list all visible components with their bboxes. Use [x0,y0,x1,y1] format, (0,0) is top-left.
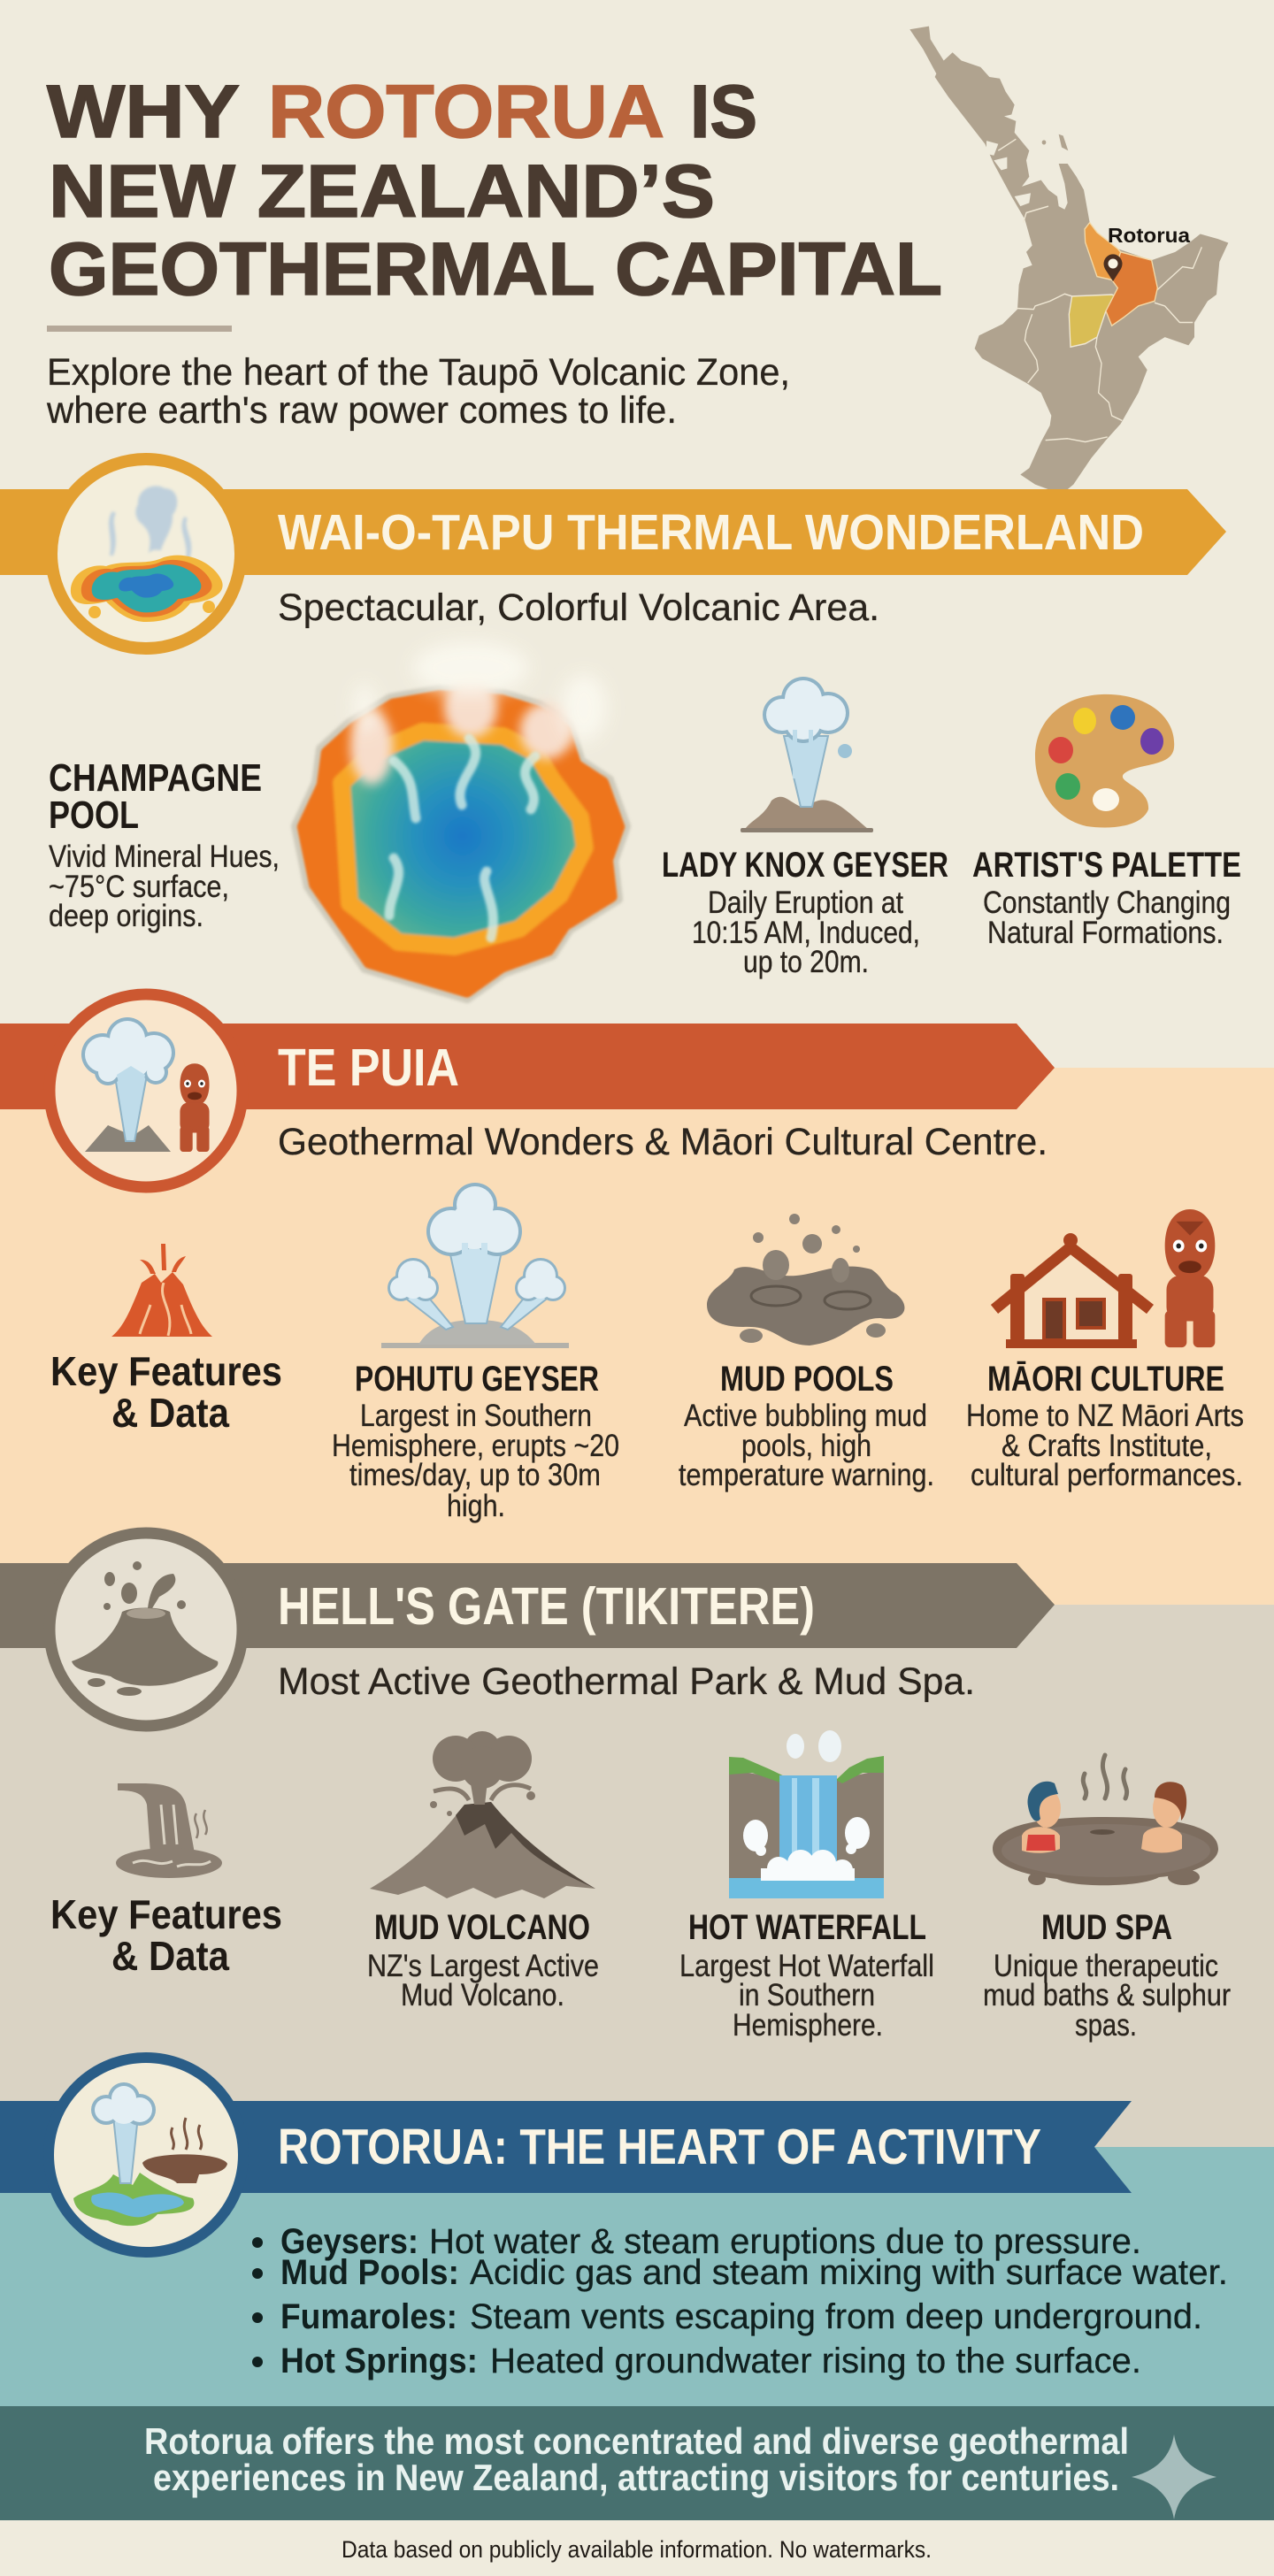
subtitle: Explore the heart of the Taupō Volcanic Zone, [47,351,790,394]
description: mud baths & sulphur [983,1978,1231,2012]
map pin [1104,254,1122,281]
icon: erupting volcano [111,1244,212,1337]
item: Fumaroles: Fumaroles: [280,2297,457,2336]
banner [0,489,1226,575]
description [983,1949,1231,2043]
subtitle [46,351,790,432]
description [49,840,280,933]
heading: POOL [49,794,139,837]
item: Geysers: Hot water & steam eruptions due to pressure. [429,2222,1141,2261]
item: Mud Spa [983,1755,1231,2043]
description: Hemisphere, erupts ~20 [332,1429,619,1463]
header panel [46,27,1228,494]
conclusion text: Rotorua offers the most concentrated and diverse geothermal [144,2420,1129,2462]
description [966,1399,1244,1492]
key features block [50,1783,282,1979]
icon: palette [1035,694,1174,828]
description: in Southern [739,1978,875,2012]
item: Artist's Palette [972,694,1241,950]
item: Mud Pools: Acidic gas and steam mixing with surface water. [470,2253,1228,2292]
description [679,1399,934,1492]
icon: bubbling mud [707,1214,904,1346]
title: NEW ZEALAND’S [49,150,715,233]
title: IS [690,70,757,153]
icon: sparkle [1132,2434,1216,2519]
heading [49,756,262,837]
description: ~75°C surface, [49,870,229,904]
map label: Rotorua [1108,224,1190,247]
section subtitle: Spectacular, Colorful Volcanic Area. [278,586,879,629]
title: WHY [47,70,240,153]
item: Champagne Pool text [49,756,280,933]
description: Active bubbling mud [684,1399,927,1433]
section title: TE PUIA [278,1039,459,1097]
key features block [50,1244,282,1436]
description: Largest Hot Waterfall [679,1949,934,1983]
heading: MUD POOLS [720,1360,894,1399]
section subtitle: Geothermal Wonders & Māori Cultural Centre. [278,1121,1048,1163]
description: Mud Volcano. [401,1978,564,2012]
banner [0,2101,1132,2193]
description: Largest in Southern [360,1399,592,1433]
description: Vivid Mineral Hues, [49,840,280,874]
description: spas. [1075,2008,1137,2043]
description: NZ's Largest Active [367,1949,599,1983]
heading: & Data [111,1933,229,1979]
footer note: Data based on publicly available information. No watermarks. [342,2536,932,2563]
description: Hemisphere. [733,2008,883,2043]
description: deep origins. [49,899,203,933]
description [692,886,920,979]
icon: triple geyser [381,1183,569,1348]
heading: HOT WATERFALL [688,1908,926,1947]
icon: wharenui and tiki [994,1209,1215,1348]
item: Geysers: Geysers: [280,2222,418,2261]
section title: WAI-O-TAPU THERMAL WONDERLAND [278,504,1144,561]
section title: HELL'S GATE (TIKITERE) [278,1577,815,1636]
heading: MUD SPA [1041,1908,1172,1947]
section title: ROTORUA: THE HEART OF ACTIVITY [278,2119,1041,2175]
heading: & Data [111,1390,229,1436]
item: Hot Waterfall [679,1730,934,2043]
description: temperature warning. [679,1458,934,1492]
description: Constantly Changing [983,886,1231,920]
item: Hot Springs: Heated groundwater rising to the surface. [490,2342,1141,2380]
description: Home to NZ Māori Arts [966,1399,1244,1433]
heading: Key Features [50,1891,282,1937]
section subtitle: Most Active Geothermal Park & Mud Spa. [278,1660,975,1703]
item: Māori Culture [966,1209,1244,1492]
map: North Island with Rotorua highlighted [909,27,1228,494]
item: Lady Knox Geyser [662,677,948,979]
title: ROTORUA [268,70,664,153]
conclusion text [144,2420,1129,2498]
description: & Crafts Institute, [1002,1429,1212,1463]
icon: hot spring badge [51,459,241,648]
description [679,1949,934,2043]
item: Mud Pools: Mud Pools: [280,2253,459,2292]
heading [50,1348,282,1436]
heading: CHAMPAGNE [49,756,262,800]
description: Daily Eruption at [708,886,903,920]
description: times/day, up to 30m [349,1458,601,1492]
item: Pohutu Geyser [332,1183,619,1523]
item: Fumaroles: Steam vents escaping from deep underground. [470,2297,1202,2336]
heading: LADY KNOX GEYSER [662,846,948,885]
description: pools, high [741,1429,871,1463]
conclusion text: experiences in New Zealand, attracting visitors for centuries. [153,2457,1119,2498]
icon: erupting mud volcano [370,1731,595,1898]
illustration: Champagne Pool [296,641,625,998]
heading: MUD VOLCANO [374,1908,590,1947]
list: geothermal features [252,2222,1228,2380]
description: 10:15 AM, Induced, [692,916,920,950]
icon: mud spa bathers [993,1755,1218,1885]
description [983,886,1231,950]
item: Mud Pools [679,1214,934,1492]
description: cultural performances. [971,1458,1243,1492]
title [47,70,942,310]
icon: hot waterfall [729,1730,884,1898]
panel: Te Puia [0,994,1274,1607]
item: Hot Springs: Hot Springs: [280,2342,478,2380]
icon: geyser [741,677,873,832]
banner [0,1563,1055,1648]
description: high. [447,1489,505,1523]
description: Natural Formations. [987,916,1224,950]
heading: MĀORI CULTURE [987,1360,1224,1399]
item: Mud Volcano [367,1731,599,2012]
description: Unique therapeutic [994,1949,1218,1983]
icon: mud volcano badge [50,1533,242,1726]
description [332,1399,619,1523]
panel: Rotorua heart of activity [0,2058,1274,2407]
icon: mud waterfall [116,1783,222,1878]
subtitle: where earth's raw power comes to life. [46,389,677,432]
heading: Key Features [50,1348,282,1394]
heading: POHUTU GEYSER [355,1360,599,1399]
panel: conclusion [0,2406,1274,2520]
panel: Wai-O-Tapu [0,459,1241,998]
title: GEOTHERMAL CAPITAL [49,227,942,310]
banner [0,1024,1055,1109]
description [367,1949,599,2012]
panel: Hell's Gate [0,1533,1274,2153]
icon: geyser and tiki badge [50,994,242,1187]
icon: geothermal features badge [49,2058,243,2252]
heading [50,1891,282,1979]
description: up to 20m. [743,945,869,979]
